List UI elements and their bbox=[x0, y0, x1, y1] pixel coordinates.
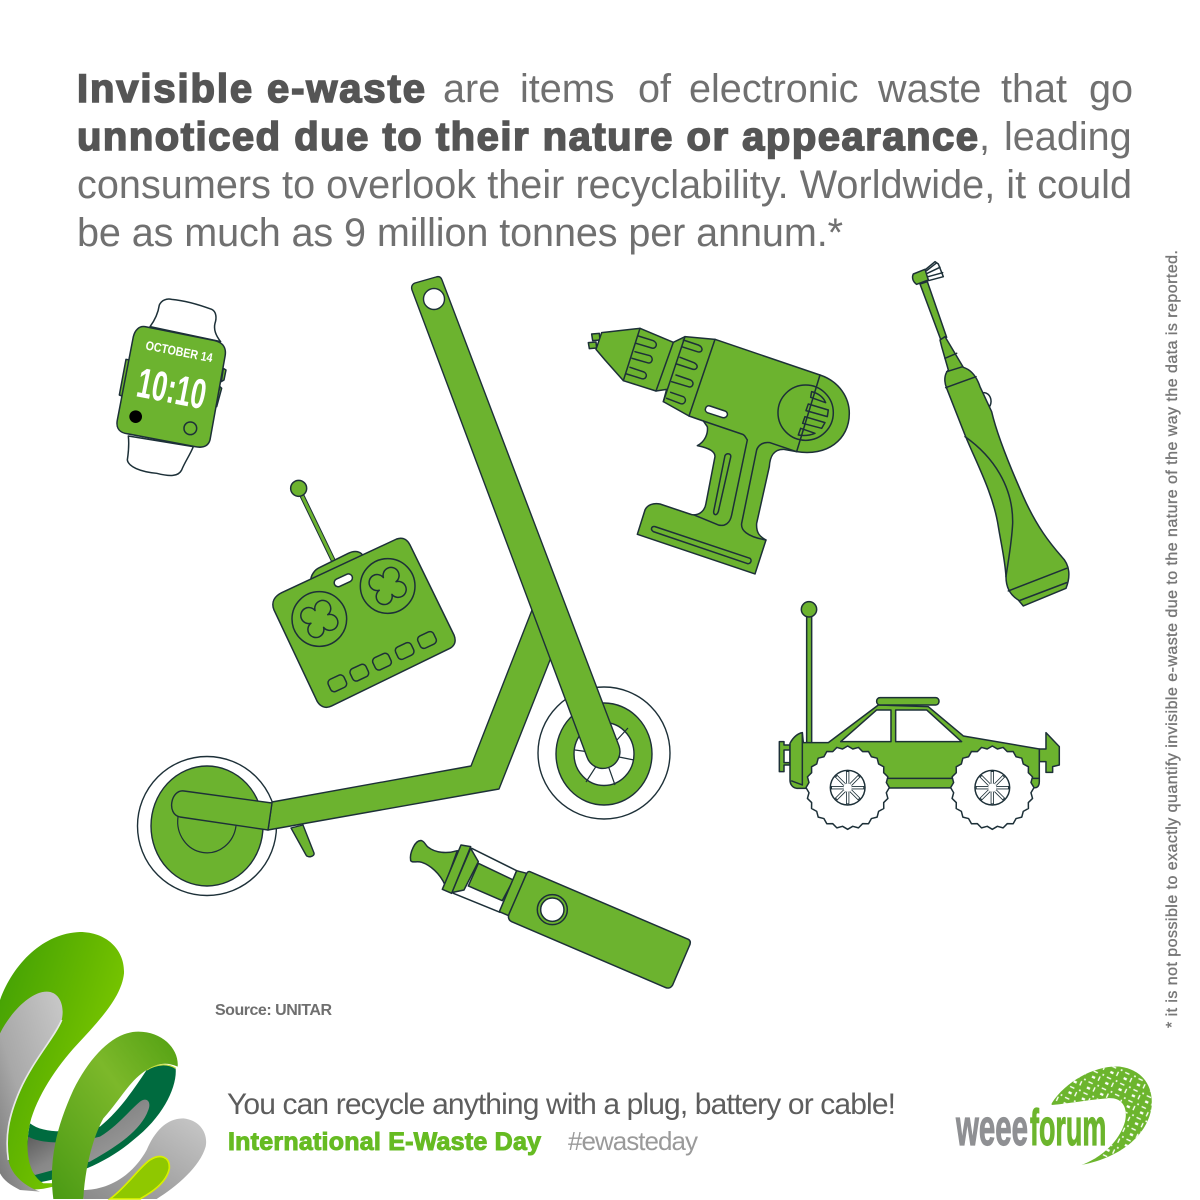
heading line 1: Invisible e-waste bbox=[77, 67, 425, 111]
heading line 2: leading bbox=[1004, 115, 1132, 159]
icon: cordless drill bbox=[588, 328, 849, 574]
swirl inner grey band bbox=[27, 1100, 149, 1175]
car front wheel bbox=[806, 746, 889, 829]
heading line 1: of bbox=[638, 67, 672, 111]
logo: WEEE Forum bbox=[955, 1067, 1152, 1165]
heading line 2: unnoticed due to their nature or appearance bbox=[77, 115, 978, 159]
swirl front green ring bbox=[52, 1032, 178, 1199]
scooter stem bbox=[412, 277, 620, 768]
scooter front wheel bbox=[538, 687, 670, 819]
scooter deck and neck bbox=[268, 610, 552, 830]
swirl yellow rim bbox=[147, 1065, 176, 1070]
swirl right grey loop bbox=[83, 1118, 206, 1199]
tagline: You can recycle anything with a plug, battery or cable! bbox=[227, 1088, 896, 1121]
vertical footnote: * it is not possible to exactly quantify invisible e-waste due to the nature of the way the data is reported. bbox=[1164, 250, 1181, 1028]
icon: smart watch: 10:10 bbox=[133, 359, 210, 418]
logo wordmark weee: weee bbox=[955, 1100, 1028, 1157]
logo swoosh bbox=[1052, 1067, 1152, 1165]
swirl yellow-green tip bbox=[110, 1157, 169, 1199]
heading line 1: go bbox=[1089, 67, 1133, 111]
logo: swirl emblem bbox=[0, 932, 206, 1199]
icon: remote-controlled toy car bbox=[779, 602, 1059, 829]
heading line 1: items bbox=[520, 67, 615, 111]
heading line 2: , bbox=[979, 115, 990, 159]
hashtag: #ewasteday bbox=[568, 1126, 698, 1156]
heading line 1: are bbox=[443, 67, 500, 111]
campaign name: International E-Waste Day bbox=[228, 1128, 541, 1156]
swirl inner dark band bbox=[27, 1065, 176, 1183]
heading line 4: be as much as 9 million tonnes per annum.* bbox=[77, 211, 843, 255]
heading line 1: waste bbox=[877, 67, 981, 111]
icon: electric scooter bbox=[138, 277, 670, 896]
scooter rear wheel bbox=[138, 756, 276, 896]
icon: electric toothbrush bbox=[913, 262, 1069, 606]
logo wordmark forum: forum bbox=[1030, 1100, 1106, 1157]
heading line 1: electronic bbox=[689, 67, 858, 111]
scooter stem hole bbox=[424, 288, 444, 310]
heading line 1: that bbox=[1001, 67, 1067, 111]
heading line 3: consumers to overlook their recyclability. Worldwide, it could bbox=[77, 163, 1132, 207]
icon: smart watch: OCTOBER 14 bbox=[144, 339, 214, 365]
icon: remote control bbox=[273, 480, 455, 707]
swirl large grey inner bbox=[0, 992, 63, 1192]
scooter kickstand bbox=[291, 825, 314, 857]
source note: Source: UNITAR bbox=[215, 1002, 332, 1019]
swirl grey highlight bbox=[7, 1020, 62, 1160]
heading line 1 bbox=[77, 67, 1133, 111]
heading: invisible e-waste definition bbox=[77, 67, 1133, 255]
swirl large green loop bbox=[0, 932, 124, 1189]
scooter rear fork bbox=[172, 791, 272, 830]
car rear wheel bbox=[951, 746, 1034, 829]
icon: vape pen bbox=[410, 841, 690, 988]
icon: smart watch bbox=[117, 299, 226, 476]
